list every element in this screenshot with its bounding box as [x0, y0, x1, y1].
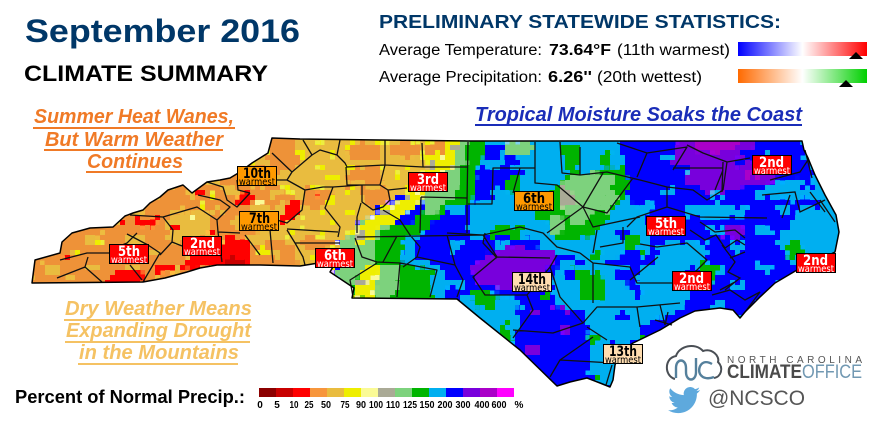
headline: dry weather: Dry Weather Means — [65, 298, 252, 320]
label: 2nd warmest southwest: warmest — [184, 247, 220, 258]
panel: statewide statistics — [379, 12, 867, 87]
label: 2nd warmest outer banks — [796, 253, 836, 275]
label: 2nd warmest coastal plain: 2nd — [679, 271, 704, 287]
legend values — [257, 400, 524, 411]
label: 5th warmest east: warmest — [648, 227, 684, 238]
temperature statistic: 73.64°F — [549, 42, 611, 59]
label: 6th warmest central: 6th — [523, 191, 545, 207]
label: 14th warmest: 14th — [518, 272, 546, 288]
icon: NC monogram — [676, 358, 714, 380]
label: 2nd warmest northeast: warmest — [754, 166, 790, 177]
icon: twitter bird — [668, 387, 700, 413]
label: 5th warmest west — [110, 244, 148, 266]
headline: dry weather: in the Mountains — [79, 342, 239, 364]
temperature statistic: (11th warmest) — [617, 42, 730, 59]
legend values: 400 — [474, 400, 490, 411]
headline: dry weather: Expanding Drought — [66, 320, 252, 342]
precipitation statistic — [379, 69, 702, 86]
legend values: 10 — [290, 400, 299, 411]
legend values: 0 — [257, 400, 263, 411]
precipitation statistic: 6.26'' — [548, 69, 592, 86]
temperature statistic: Average Temperature: — [379, 42, 542, 59]
label: 2nd warmest coastal plain — [672, 271, 712, 293]
label: 5th warmest east: 5th — [655, 216, 677, 232]
statistics heading: PRELIMINARY STATEWIDE STATISTICS: — [379, 12, 781, 32]
headline: summer heat — [33, 106, 235, 173]
legend values: % — [515, 400, 524, 411]
headline: summer heat: But Warm Weather — [45, 129, 224, 151]
label: 10th warmest: warmest — [239, 177, 275, 188]
label: 10th warmest — [238, 166, 276, 188]
label: 6th warmest central — [514, 191, 554, 213]
label: 14th warmest: warmest — [514, 283, 550, 294]
label: 7th warmest: warmest — [241, 222, 277, 233]
label: 6th warmest south piedmont: warmest — [317, 259, 353, 270]
legend values: 75 — [340, 400, 350, 411]
label: 2nd warmest outer banks: 2nd — [803, 253, 828, 269]
label: 2nd warmest northeast: 2nd — [759, 155, 784, 171]
legend values: 200 — [438, 400, 453, 411]
label: 7th warmest: 7th — [249, 211, 270, 227]
map: percent of normal precipitation — [31, 137, 840, 388]
label: 3rd warmest: 3rd — [417, 172, 439, 188]
label: 2nd warmest northeast — [752, 155, 792, 177]
headline: dry weather — [64, 298, 252, 365]
legend values: 100 — [369, 400, 383, 411]
temperature statistic — [379, 42, 730, 59]
state outline — [32, 138, 839, 387]
estuaries and sounds — [606, 150, 835, 385]
precipitation gauge — [738, 69, 867, 87]
legend values: 300 — [456, 400, 471, 411]
precipitation statistic: (20th wettest) — [597, 69, 702, 86]
logo wordmark: NORTH CAROLINA — [727, 355, 862, 366]
label: 5th warmest west: 5th — [118, 244, 140, 260]
label: 13th warmest: warmest — [605, 355, 641, 366]
label: 10th warmest: 10th — [243, 166, 271, 182]
twitter handle: @NCSCO — [708, 387, 805, 410]
headline: summer heat: Summer Heat Wanes, — [34, 106, 234, 128]
title: September 2016 — [25, 13, 300, 49]
logo: North Carolina Climate Office — [667, 346, 862, 383]
label: 2nd warmest coastal plain: warmest — [674, 282, 710, 293]
label: 3rd warmest — [408, 172, 448, 194]
legend: percent of normal precipitation — [15, 387, 524, 411]
legend values: 150 — [420, 400, 435, 411]
headline: summer heat: Continues — [87, 151, 183, 173]
legend values: 110 — [386, 400, 400, 411]
temperature gauge — [738, 42, 867, 59]
label: 14th warmest — [512, 272, 552, 294]
label: 7th warmest — [240, 211, 278, 233]
headline: tropical moisture: Tropical Moisture Soaks the Coast — [475, 104, 803, 126]
logo wordmark — [727, 355, 862, 383]
label: 2nd warmest outer banks: warmest — [798, 264, 834, 275]
subtitle: CLIMATE SUMMARY — [24, 61, 268, 86]
legend values: 5 — [274, 400, 280, 411]
legend values: 50 — [321, 400, 331, 411]
legend values: 90 — [356, 400, 366, 411]
county boundaries — [57, 140, 767, 377]
legend values: 25 — [304, 400, 314, 411]
label: 6th warmest south piedmont: 6th — [324, 248, 346, 264]
logo wordmark: OFFICE — [802, 362, 862, 383]
legend title: Percent of Normal Precip.: — [15, 387, 245, 407]
label: 2nd warmest southwest — [182, 236, 222, 258]
label: 6th warmest south piedmont — [316, 248, 354, 270]
icon: cloud — [667, 346, 721, 379]
precipitation statistic: Average Precipitation: — [379, 69, 542, 86]
label: 5th warmest west: warmest — [111, 255, 147, 266]
label: 6th warmest central: warmest — [516, 202, 552, 213]
label: 13th warmest — [604, 344, 642, 366]
legend values: 600 — [492, 400, 507, 411]
legend values: 125 — [403, 400, 417, 411]
logo wordmark: CLIMATE — [727, 362, 802, 383]
label: 3rd warmest: warmest — [410, 183, 446, 194]
label: 13th warmest: 13th — [609, 344, 637, 360]
label: 2nd warmest southwest: 2nd — [190, 236, 215, 252]
label: 5th warmest east — [646, 216, 686, 238]
legend colour scale — [259, 388, 514, 397]
